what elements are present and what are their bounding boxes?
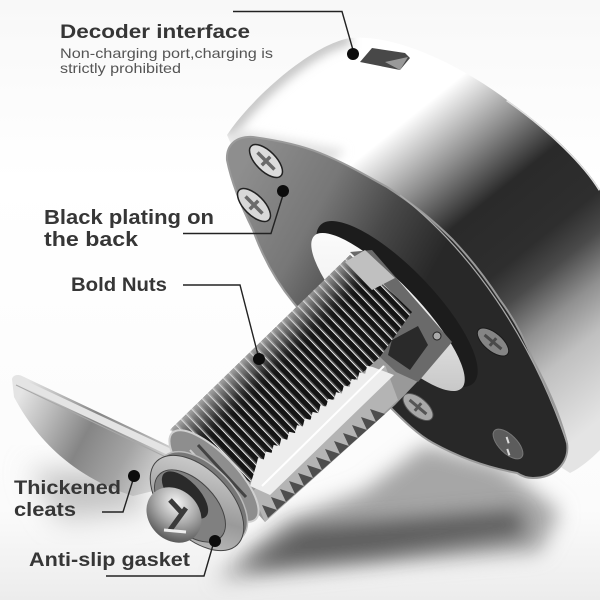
label: decoder interface: Non-charging port,charging is bbox=[60, 45, 273, 61]
cylinder body bbox=[220, 30, 600, 480]
leader: black plating bbox=[183, 185, 289, 234]
screw 2 bbox=[232, 183, 276, 227]
label: black plating on the back: Black plating on bbox=[44, 206, 214, 229]
label: decoder interface bbox=[60, 21, 273, 76]
gasket washers bbox=[133, 436, 263, 568]
leader: anti-slip gasket bbox=[106, 535, 221, 576]
screw 1 bbox=[244, 139, 288, 183]
back face plate bbox=[227, 137, 567, 478]
shadow on surface bbox=[30, 445, 560, 580]
label: decoder interface: strictly prohibited bbox=[60, 60, 181, 76]
label: thickened cleats bbox=[14, 478, 121, 521]
leader: thickened cleats bbox=[102, 470, 140, 512]
threaded section bbox=[170, 255, 413, 482]
label: anti-slip gasket: Anti-slip gasket bbox=[29, 550, 191, 571]
label: thickened cleats: cleats bbox=[14, 500, 76, 521]
label: bold nuts: Bold Nuts bbox=[71, 275, 167, 296]
leader: bold nuts bbox=[183, 285, 265, 365]
screw head bbox=[135, 476, 213, 554]
leader: decoder interface bbox=[233, 12, 359, 60]
screw 3 bbox=[473, 323, 513, 361]
locking cam plate bbox=[12, 375, 178, 496]
smooth bolt end bbox=[350, 250, 452, 382]
centre hole bbox=[293, 200, 499, 409]
bottom flat with teeth bbox=[252, 365, 398, 522]
screw 5 bbox=[488, 424, 528, 464]
label: black plating on the back bbox=[44, 206, 214, 251]
port: decoder interface bbox=[360, 48, 410, 70]
label: thickened cleats: Thickened bbox=[14, 478, 121, 499]
label: black plating on the back: the back bbox=[44, 228, 139, 251]
bright flat with jagged edge bbox=[250, 366, 394, 495]
label: decoder interface: Decoder interface bbox=[60, 21, 250, 43]
threaded bolt bbox=[170, 250, 452, 522]
collar bbox=[156, 418, 272, 534]
screw 4 bbox=[398, 389, 438, 425]
